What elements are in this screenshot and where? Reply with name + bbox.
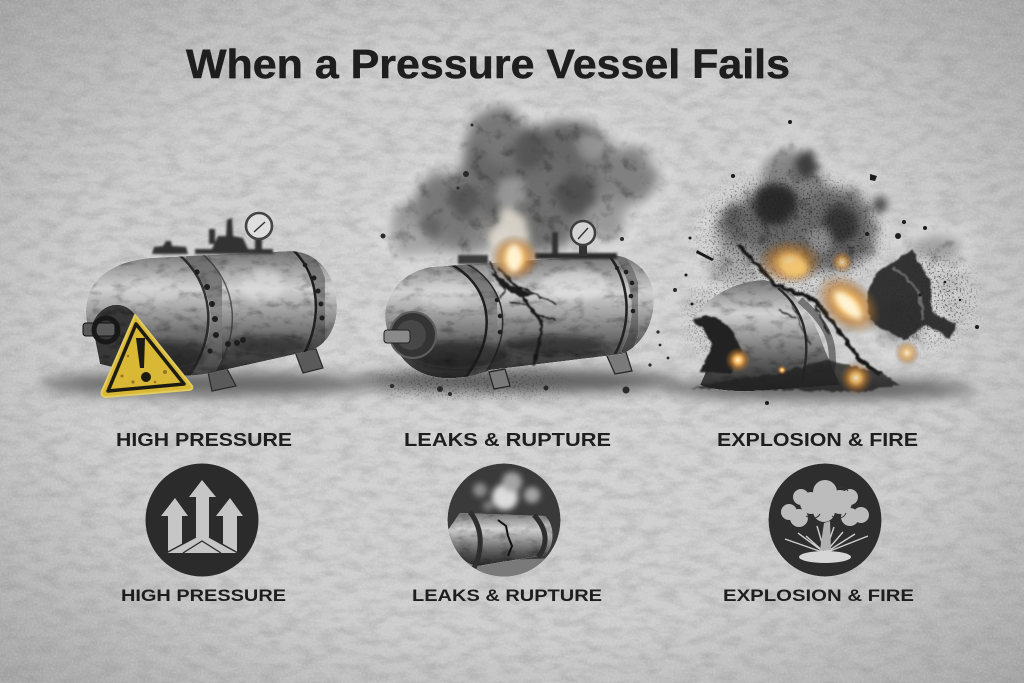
vessel 2: cracked and leaking: [375, 124, 677, 396]
vessel 3 lower wreck shadow: [690, 360, 900, 392]
mini crack: [498, 520, 512, 556]
vessel 3 fireballs: [725, 238, 920, 395]
vessel 2 pressure gauge: [571, 221, 595, 256]
vessel 1 valves and fittings: [152, 218, 273, 254]
column 3 caption: EXPLOSION & FIRE: [723, 586, 914, 605]
vessel 2 flying debris: [380, 124, 677, 396]
vessel 3 flying debris: [684, 120, 979, 405]
vessel 2 ground dust: [375, 374, 565, 394]
vessel 2 rivets: [495, 266, 635, 334]
ground shadow: [40, 369, 975, 399]
vessel 3 torn jagged seam: [738, 245, 880, 375]
vessel 2 fittings: [458, 232, 617, 264]
mushroom cloud: [781, 480, 869, 527]
icon: yellow warning triangle: [102, 315, 192, 397]
vessel 3: exploded wreck: [684, 120, 979, 405]
vessel 2 smoke plume: [383, 98, 664, 264]
vessel 2 bands: [442, 252, 637, 382]
spray of debris particles: [688, 175, 975, 355]
vessel 3 smoke cloud: [688, 142, 975, 355]
vessel 1 metal highlights: [120, 269, 310, 369]
vessel 1: intact with warning sign: [83, 213, 337, 397]
steam cloud: [473, 472, 540, 511]
vessel 1 body: [86, 251, 337, 376]
icon: explosion cloud: [768, 464, 882, 576]
vessel 3 right end fragment: [867, 250, 956, 340]
vessel 2 fire burst: [489, 208, 541, 282]
column 1 heading: HIGH PRESSURE: [116, 430, 292, 450]
explosion rays: [785, 526, 868, 553]
column 1 caption: HIGH PRESSURE: [121, 586, 286, 605]
column 2 heading: LEAKS & RUPTURE: [404, 430, 611, 450]
mini vessel body: [448, 513, 552, 566]
cloud shadow arcs: [806, 487, 848, 518]
icon: ruptured vessel: [448, 464, 560, 580]
vessel 1 feet: [208, 349, 323, 391]
column 3 heading: EXPLOSION & FIRE: [717, 430, 918, 450]
vessel 1 end flange and nozzle: [83, 305, 138, 372]
vessel 2 body: [385, 255, 654, 378]
column 2 caption: LEAKS & RUPTURE: [412, 586, 602, 605]
title: When a Pressure Vessel Fails: [186, 41, 790, 87]
vessel 1 pressure gauge: [246, 213, 272, 239]
vessel 2 flange and nozzle: [384, 312, 436, 358]
vessel 2 metal highlights: [410, 270, 609, 369]
icon: high pressure arrows: [146, 464, 258, 576]
vessel 3 left shell fragment: [691, 280, 840, 391]
vessel 2 crack: [490, 262, 556, 366]
vessel 2 feet: [489, 352, 632, 389]
vessel 1 rivets: [194, 263, 324, 354]
vessel 1 rivet bands: [176, 248, 324, 380]
